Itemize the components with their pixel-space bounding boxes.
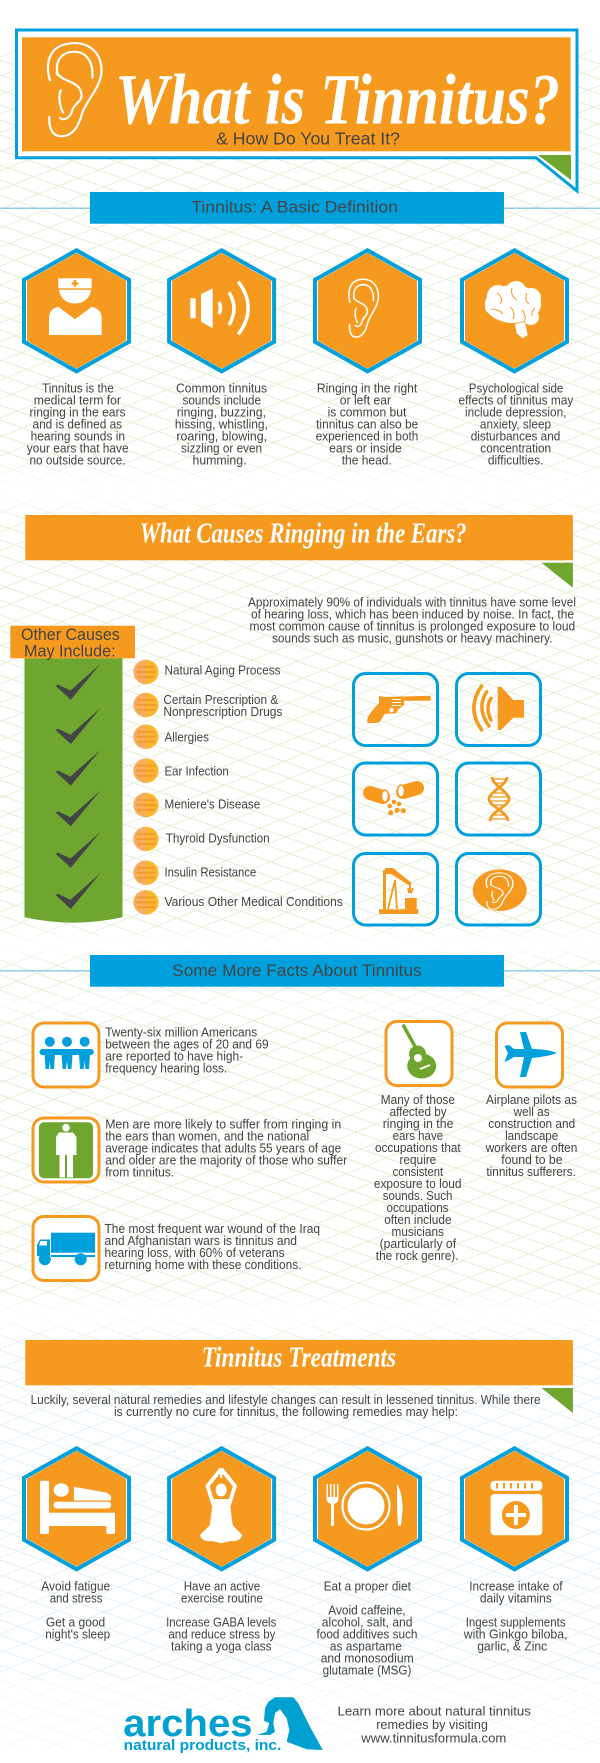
text: musicians fact: require [400,1153,436,1167]
text: fact two [105,1117,347,1179]
text: treatment column 3: food additives such [316,1628,418,1642]
list: causes: Ear Infection [164,764,229,778]
text: definition column 1 [27,381,129,467]
text: musicians fact: musicians [392,1225,444,1239]
text: fact two: the ears than women, and the national [105,1129,309,1143]
text: treatment column 1: Get a good [46,1616,105,1630]
text: musicians fact: the rock genre). [376,1249,458,1263]
icon: loudspeaker hexagon [169,250,274,371]
text: definition column 3: ears or inside [329,441,402,455]
list: causes: Thyroid Dysfunction [166,832,270,846]
text: musicians fact: affected by [390,1105,447,1119]
text: treatment column 4: daily vitamins [480,1592,552,1606]
text: fact two: average indicates that adults 55 years of age [105,1141,341,1155]
text: definition column 3: tinnitus can also be [316,417,418,431]
icon: vitamin jar hexagon [462,1448,567,1569]
text: treatment column 1: night's sleep [45,1628,110,1642]
text: pilots fact: construction and [488,1117,575,1131]
check marks [56,664,100,909]
text: musicians fact: (particularly of [380,1237,457,1251]
list: causes: Meniere's Disease [164,798,260,812]
section heading: causes: What Causes Ringing in the Ears? [140,519,467,550]
text: pilots fact: workers are often [485,1141,577,1155]
text: treatments intro [31,1393,541,1419]
list: causes: Various Other Medical Conditions [164,895,343,909]
text: fact one: between the ages of 20 and 69 [105,1038,269,1052]
text: definition column 4: include depression, [465,405,566,419]
orange title panel [22,37,571,151]
text: definition column 3: the head. [342,453,392,467]
text: treatment column 4: garlic, & Zinc [477,1640,547,1654]
icon: ear in oval [456,854,540,925]
speech bubble frame [16,30,577,191]
text: treatment column 3: Eat a proper diet [324,1580,411,1594]
text: fact three [104,1222,320,1272]
text: definition column 2 [175,381,268,467]
text: musicians fact: occupations that [375,1141,461,1155]
section heading: causes [25,515,573,588]
text: treatment column 2 [166,1580,276,1654]
text: pilots fact: landscape [505,1129,558,1143]
text: definition column 1: ringing in the ears [30,405,126,419]
text: definition column 4: effects of tinnitus may [458,393,574,407]
text: treatment column 4: with Ginkgo biloba, [463,1628,568,1642]
text: definition column 3 [316,381,418,467]
text: definition column 1: no outside source. [30,453,126,467]
text: treatment column 2: exercise routine [181,1592,263,1606]
text: definition column 3: or left ear [340,393,391,407]
text: definition column 1: hearing sounds in [31,429,125,443]
text: treatment column 3: and monosodium [321,1652,414,1666]
text: treatment column 3: alcohol, salt, and [322,1616,413,1630]
text: musicians fact: sounds. Such [383,1189,452,1203]
text: treatment column 4: Ingest supplements [466,1616,566,1630]
text: musicians fact: Many of those [381,1093,455,1107]
text: fact one [105,1026,269,1076]
text: causes intro: sounds such as music, gunshots or heavy machinery. [272,632,552,646]
icon: guitar [386,1022,452,1086]
text: fact three: and Afghanistan wars is tinnitus and [104,1234,297,1248]
icon: speaker [456,674,540,746]
icon: nurse hexagon [24,250,129,371]
green banner [24,658,122,923]
icon: DNA [456,763,540,835]
green corner triangle [538,155,571,180]
text: causes intro: Approximately 90% of individuals with tinnitus have some level [248,596,576,610]
text: treatment column 1: Avoid fatigue [41,1580,110,1594]
text: call to action [338,1703,531,1745]
text: definition column 2: roaring, blowing, [176,429,267,443]
list: causes: Allergies [164,730,209,744]
text: fact two: from tinnitus. [105,1165,174,1179]
text: musicians fact: exposure to loud [374,1177,462,1191]
text: treatment column 3: Avoid caffeine, [328,1604,406,1618]
list: causes: Nonprescription Drugs [163,705,282,719]
section heading: basic definition: Tinnitus: A Basic Definition [191,197,398,216]
text: definition column 2: ringing, buzzing, [177,405,266,419]
text: pilots fact: found to be [501,1153,563,1167]
text: treatment column 1: and stress [50,1592,102,1606]
text: definition column 4: disturbances and [471,429,560,443]
panel: other causes checklist [10,625,135,923]
text: treatment column 3: as aspartame [330,1640,402,1654]
text: treatment column 3: glutamate (MSG) [323,1664,411,1678]
icon: revolver [354,674,438,746]
icon: oil pump [354,854,438,925]
list: causes: Insulin Resistance [164,866,256,880]
text: fact two: Men are more likely to suffer from ringing in [105,1117,341,1131]
icon: airplane [496,1023,562,1087]
text: musicians fact [374,1093,462,1263]
text: fact one: are reported to have high- [105,1050,243,1064]
text: call to action: www.tinnitusformula.com [360,1730,506,1745]
text: musicians fact: occupations [386,1201,448,1215]
text: treatment column 3 [316,1580,418,1678]
icon: man [33,1118,99,1182]
logo: arches natural products [123,1697,323,1754]
text: definition column 4 [458,381,574,467]
text: definition column 4: concentration [480,441,551,455]
text: definition column 1: medical term for [34,393,121,407]
text: fact three: The most frequent war wound of the Iraq [104,1222,320,1236]
banner heading: Other Causes [21,625,120,644]
text: causes intro: of hearing loss, which has been induced by noise. In fact, the [251,608,574,622]
text: treatments intro: Luckily, several natural remedies and lifestyle changes can result in lessened tinnitus. While there [31,1393,541,1407]
text: musicians fact: consistent [393,1165,444,1179]
icon: ear hexagon [315,250,420,371]
section heading: basic definition [90,192,504,224]
section heading: treatments: Tinnitus Treatments [202,1343,396,1374]
section heading: treatments [25,1340,573,1413]
text: pilots fact: well as [513,1105,550,1119]
header banner [16,30,577,191]
text: definition column 3: Ringing in the right [317,381,418,395]
text: definition column 2: sizzling or even [181,441,262,455]
text: definition column 4: difficulties. [488,453,543,467]
text: call to action: remedies by visiting [376,1717,488,1732]
banner heading: May Include: [24,642,116,661]
icon: brain hexagon [462,250,567,371]
icon: bed hexagon [24,1448,129,1569]
text: pilots fact: Airplane pilots as [486,1093,577,1107]
text: causes intro [248,596,576,646]
logo: arches natural products: arches [123,1703,253,1745]
icon: ear [48,43,101,136]
text: definition column 1: and is defined as [32,417,122,431]
text: musicians fact: often include [384,1213,452,1227]
section heading: more facts [90,955,504,987]
logo: arches natural products: natural products, inc. [124,1737,281,1754]
text: pilots fact [485,1093,577,1179]
text: fact three: hearing loss, with 60% of veterans [104,1246,284,1260]
text: pilots fact: tinnitus sufferers. [486,1165,576,1179]
text: definition column 2: sounds include [182,393,261,407]
icon: plate and cutlery hexagon [315,1448,420,1569]
text: musicians fact: ears have [393,1129,443,1143]
icon: group of people [33,1023,99,1087]
text: treatments intro: is currently no cure for tinnitus, the following remedies may help: [114,1405,458,1419]
icon: truck [33,1216,99,1280]
icon: pills [354,763,438,835]
text: definition column 2: hissing, whistling, [175,417,268,431]
text: definition column 1: Tinnitus is the [42,381,114,395]
text: definition column 2: humming. [192,453,246,467]
text: treatment column 2: Have an active [184,1580,260,1594]
text: treatment column 2: and reduce stress by [168,1628,276,1642]
icon: yoga hexagon [169,1448,274,1569]
text: treatment column 1 [41,1580,110,1642]
text: fact three: returning home with these conditions. [104,1258,302,1272]
list: causes: Certain Prescription & [163,693,279,707]
text: definition column 3: experienced in both [316,429,418,443]
text: definition column 1: your ears that have [27,441,129,455]
text: treatment column 4 [463,1580,568,1654]
text: fact one: Twenty-six million Americans [105,1026,257,1040]
text: treatment column 2: Increase GABA levels [166,1616,276,1630]
banner heading [10,625,135,661]
text: fact two: and older are the majority of those who suffer [105,1153,347,1167]
text: musicians fact: ringing in the [383,1117,454,1131]
text: definition column 4: anxiety, sleep [480,417,551,431]
text: definition column 2: Common tinnitus [176,381,267,395]
list: causes [133,660,343,914]
section heading: more facts: Some More Facts About Tinnitus [172,961,422,980]
text: causes intro: most common cause of tinnitus is prolonged exposure to loud [250,620,575,634]
list: causes: Natural Aging Process [164,663,280,677]
text: definition column 3: is common but [328,405,407,419]
text: fact one: frequency hearing loss. [105,1062,227,1076]
text: treatment column 2: taking a yoga class [171,1640,272,1654]
text: definition column 4: Psychological side [469,381,563,395]
subtitle: & How Do You Treat It? [216,128,400,148]
text: treatment column 4: Increase intake of [469,1580,563,1594]
text: call to action: Learn more about natural tinnitus [338,1703,531,1718]
